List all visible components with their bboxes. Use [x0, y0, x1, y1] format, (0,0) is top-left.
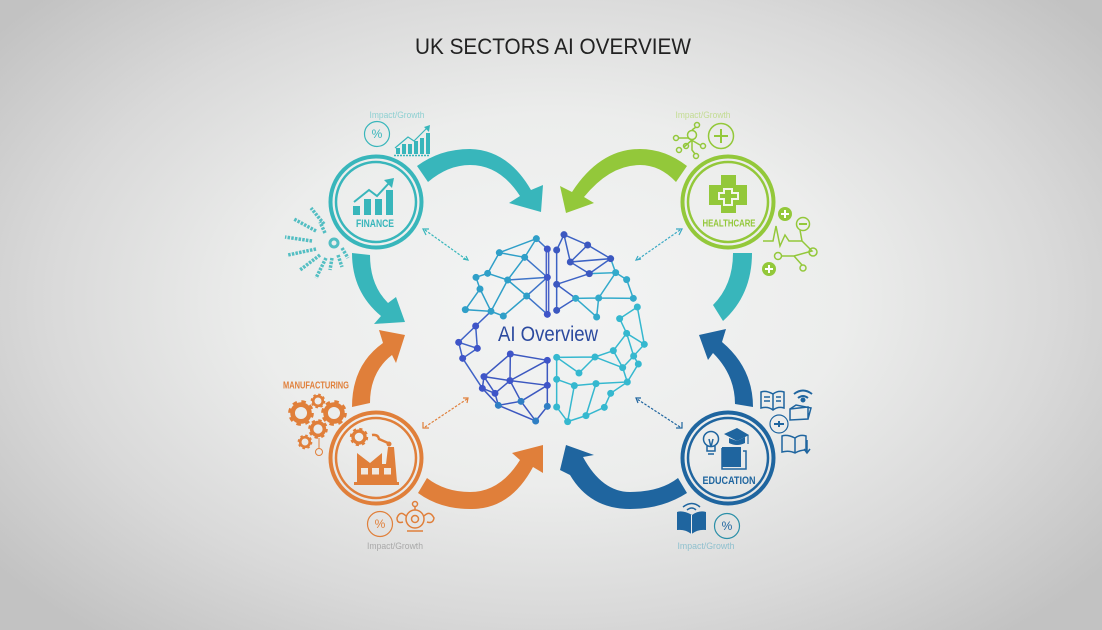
icon: percent circle education: % — [722, 519, 733, 533]
arrow: dashed link education — [636, 398, 682, 428]
panel: education — [677, 390, 812, 552]
arrow: dashed link healthcare — [636, 229, 682, 260]
icon: factory — [354, 447, 399, 485]
panel: manufacturing — [283, 380, 434, 552]
impact label education: Impact/Growth — [678, 541, 734, 552]
icon: gear and wrench — [351, 429, 392, 446]
healthcare label: HEALTHCARE — [702, 218, 756, 230]
icon: light bulb — [704, 432, 718, 454]
icon: percent circle manufacturing: % — [375, 517, 386, 531]
panel: healthcare — [674, 110, 817, 276]
education label: EDUCATION — [702, 475, 756, 487]
impact label healthcare: Impact/Growth — [676, 110, 730, 121]
manufacturing label: MANUFACTURING — [283, 380, 349, 392]
impact label manufacturing: Impact/Growth — [367, 541, 423, 552]
finance label: FINANCE — [356, 218, 394, 230]
arrow: dashed link finance — [423, 229, 468, 260]
arrow: finance to manufacturing side (teal down) — [352, 253, 405, 324]
arrow: education to AI (blue bottom) — [560, 445, 687, 509]
arrow: education upward (blue) — [699, 329, 753, 407]
icon: gear cluster — [290, 395, 345, 456]
icon: box — [790, 405, 811, 420]
icon: book — [722, 447, 746, 469]
arrow: healthcare to AI (green) — [560, 149, 687, 213]
icon: small growth chart — [394, 125, 430, 156]
icon: percent circle education — [714, 514, 740, 538]
icon: percent circle manufacturing — [368, 512, 392, 536]
icon: medical cross — [709, 175, 747, 213]
arrow: manufacturing upward (orange) — [352, 330, 405, 407]
education rings — [682, 412, 774, 504]
icon: open book outline — [782, 435, 810, 453]
icon: percent circle finance: % — [372, 127, 383, 141]
icon: wifi top — [794, 390, 812, 402]
central AI brain network — [455, 231, 648, 425]
arrow: finance to AI (teal top) — [417, 149, 543, 212]
manufacturing rings — [330, 412, 422, 504]
icon: wifi book — [677, 504, 706, 534]
icon: open book — [761, 391, 784, 410]
finance rings — [330, 156, 422, 248]
icon: health network top — [674, 122, 706, 158]
icon: finance data burst — [285, 208, 348, 278]
panel: finance — [285, 110, 430, 278]
arrow: manufacturing to AI (orange bottom) — [418, 445, 543, 509]
healthcare rings — [682, 156, 774, 248]
icon: graduation cap — [724, 428, 749, 445]
arrow: dashed link manufacturing — [423, 398, 468, 428]
icon: health pulse and nodes — [762, 207, 817, 276]
icon: plus circle — [708, 124, 734, 148]
icon: robot machine — [397, 502, 434, 531]
AI Overview label: AI Overview — [498, 323, 599, 346]
icon: finance bar chart — [353, 178, 394, 215]
arrow: healthcare downward (teal) — [713, 253, 752, 321]
icon: circle toggle — [770, 415, 788, 433]
icon: percent circle finance — [364, 122, 390, 146]
impact label finance: Impact/Growth — [370, 110, 424, 121]
title: UK SECTORS AI OVERVIEW — [415, 34, 691, 59]
